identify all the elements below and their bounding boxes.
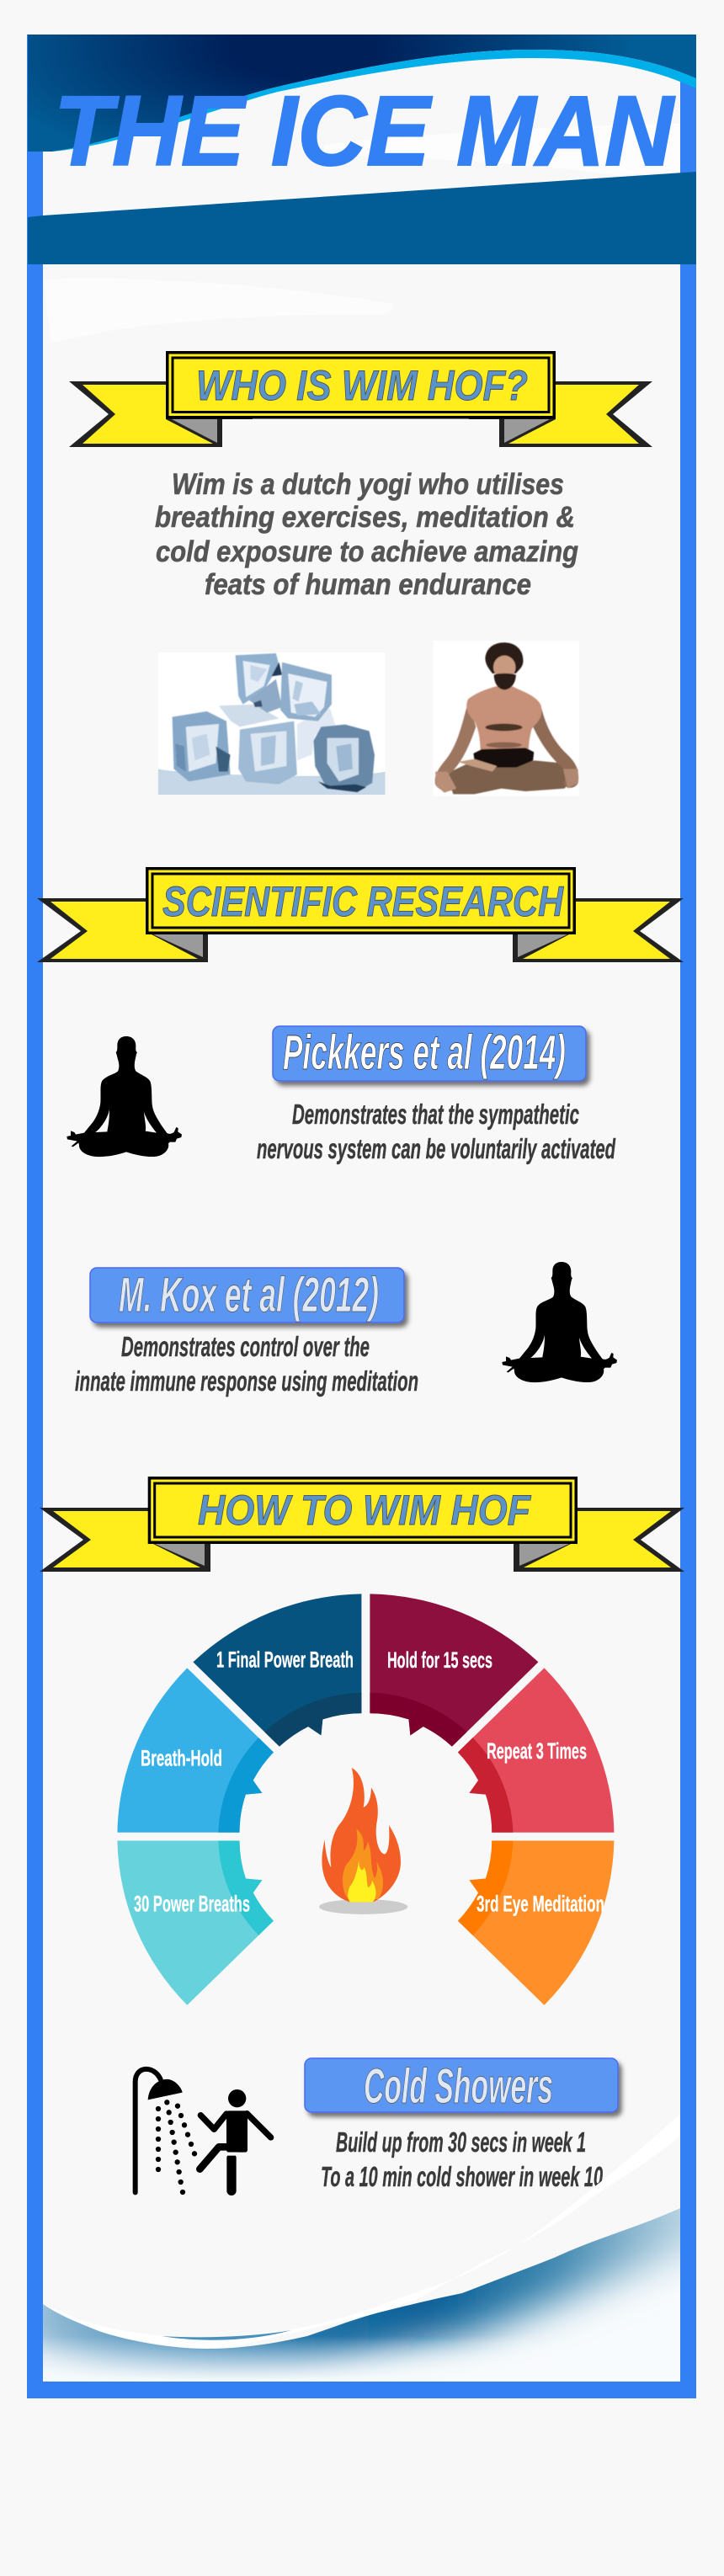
image: ice cubes bbox=[158, 652, 385, 795]
icon: flame bbox=[319, 1768, 407, 1914]
intro paragraph: Wim is a dutch yogi who utilises bbox=[172, 468, 564, 501]
ribbon: how to wim hof: HOW TO WIM HOF bbox=[198, 1487, 531, 1534]
text: pickkers finding bbox=[257, 1099, 616, 1164]
wheel labels: 30 Power Breaths bbox=[134, 1891, 250, 1916]
text: kox finding bbox=[75, 1331, 418, 1397]
card: pickkers bbox=[273, 1025, 586, 1081]
card: cold showers bbox=[305, 2058, 618, 2114]
ribbon: who is wim hof bbox=[69, 351, 652, 447]
segment: breath-hold bbox=[117, 1668, 274, 1833]
intro paragraph: feats of human endurance bbox=[205, 568, 531, 601]
intro paragraph bbox=[155, 468, 578, 601]
segment: 30 power breaths bbox=[117, 1840, 274, 2005]
text: shower plan bbox=[321, 2126, 603, 2192]
decorative highlight swoosh bbox=[44, 279, 394, 343]
wheel labels: Hold for 15 secs bbox=[387, 1647, 492, 1673]
ribbon: scientific research bbox=[37, 867, 684, 962]
segment: repeat 3 times bbox=[458, 1668, 614, 1833]
header banner bbox=[28, 35, 696, 264]
wheel labels: 3rd Eye Meditation bbox=[476, 1891, 604, 1916]
wheel labels: Breath-Hold bbox=[141, 1746, 222, 1771]
ribbon: who is wim hof: WHO IS WIM HOF? bbox=[196, 362, 528, 409]
image: wim hof seated bbox=[434, 641, 579, 796]
ribbon: scientific research: SCIENTIFIC RESEARCH bbox=[162, 878, 564, 925]
ribbon: how to wim hof bbox=[40, 1477, 684, 1572]
footer wave bbox=[43, 2180, 680, 2379]
wheel labels bbox=[134, 1647, 604, 1916]
chart: breathing cycle wheel bbox=[117, 1594, 614, 2005]
icon: cold shower bbox=[136, 2069, 271, 2195]
icon: meditation silhouette right bbox=[502, 1262, 617, 1382]
wheel labels: Repeat 3 Times bbox=[487, 1738, 587, 1764]
card: cold showers: Cold Showers bbox=[364, 2059, 553, 2114]
intro paragraph: cold exposure to achieve amazing bbox=[156, 535, 578, 568]
wheel labels: 1 Final Power Breath bbox=[216, 1647, 354, 1672]
icon: meditation silhouette left bbox=[67, 1036, 182, 1157]
card: kox: M. Kox et al (2012) bbox=[119, 1268, 379, 1323]
text: kox finding: innate immune response using meditation bbox=[75, 1365, 418, 1397]
title: THE ICE MAN bbox=[54, 76, 676, 187]
text: kox finding: Demonstrates control over the bbox=[121, 1331, 370, 1362]
intro paragraph: breathing exercises, meditation & bbox=[155, 501, 575, 534]
card: kox bbox=[90, 1268, 404, 1323]
segment: final power breath bbox=[193, 1594, 361, 1747]
segment: hold for 15 secs bbox=[370, 1594, 538, 1747]
segment: 3rd eye meditation bbox=[458, 1840, 614, 2005]
